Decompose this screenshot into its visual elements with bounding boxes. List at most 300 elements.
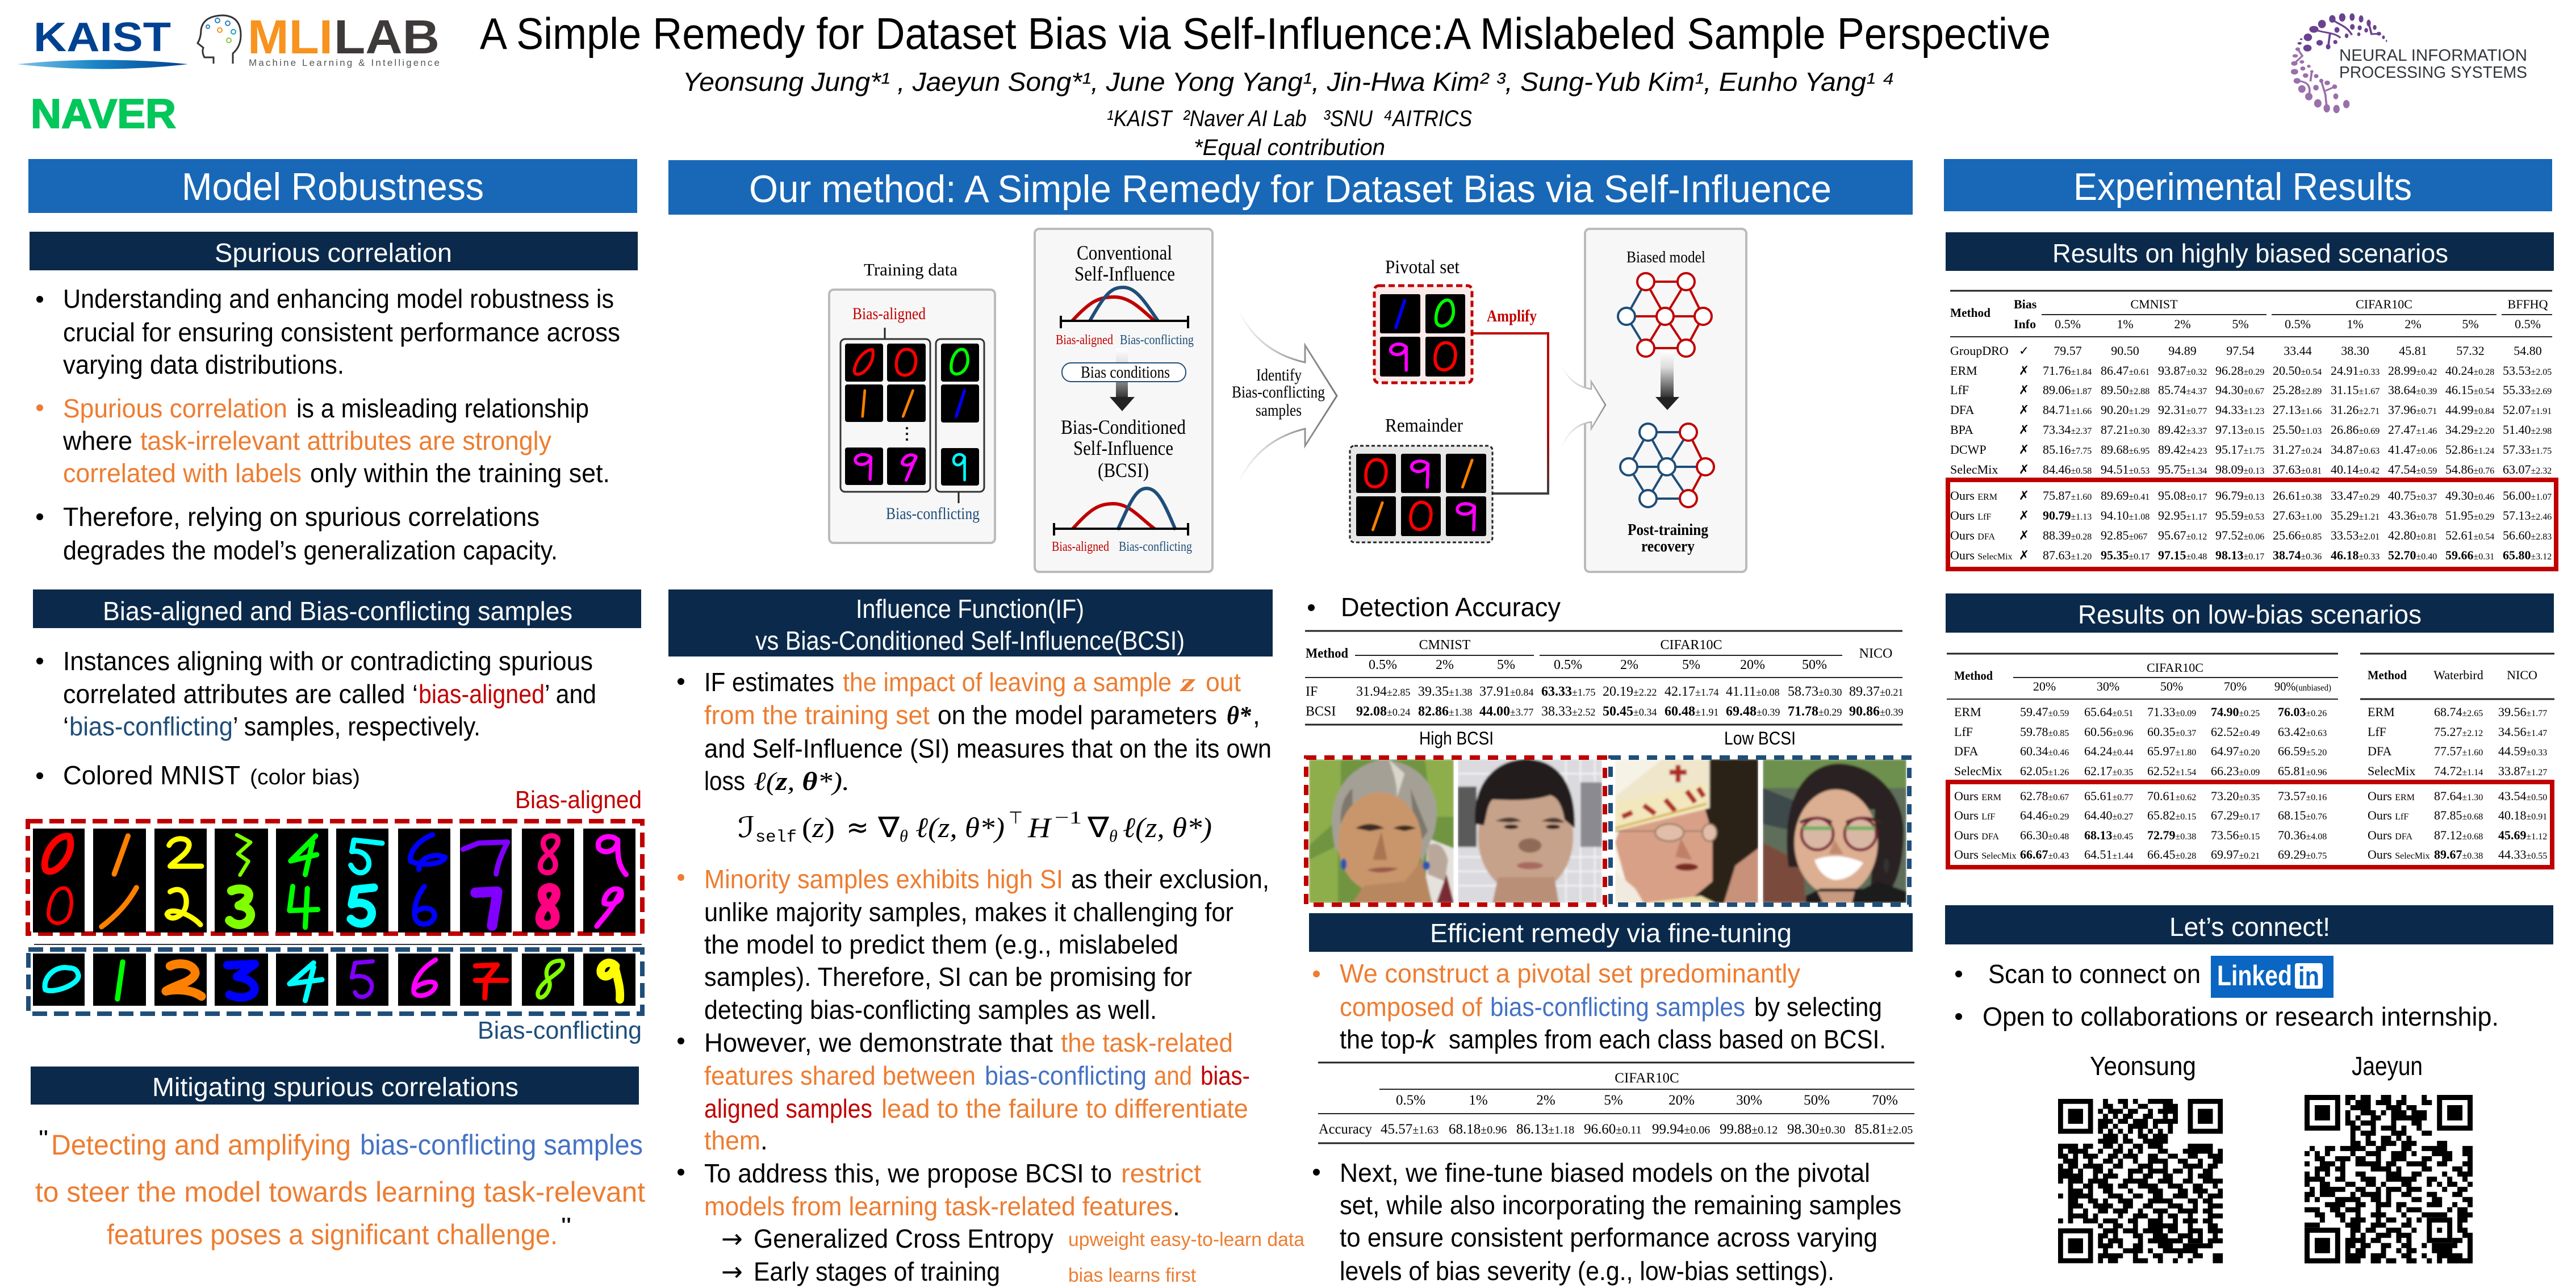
text block: influence function: θ* [1227,701,1252,730]
table: low-bias CIFAR10C [1947,654,2338,862]
text block: spurious correlation bullets: is a misleading relationship [296,394,589,423]
table: highly biased results: ✗ [2019,488,2029,503]
table: detection accuracy: Method [1306,646,1349,661]
table: detection accuracy: 82.86±1.38 [1418,704,1472,719]
table: highly biased results: 0.5% [2515,317,2541,331]
table: low-bias CIFAR10C: 64.40±0.27 [2084,808,2133,822]
table: highly biased results: 2% [2174,317,2191,331]
table: pivotal accuracy: 30% [1736,1093,1762,1108]
table: low-bias Waterbird and NICO: 39.56±1.77 [2498,705,2547,719]
table: detection accuracy [1305,631,1903,725]
table: highly biased results: 94.89 [2168,344,2197,358]
subheading: mitigating spurious correlations [31,1067,639,1105]
table: low-bias CIFAR10C: 59.78±0.85 [2020,725,2069,739]
table: low-bias CIFAR10C: 60.35±0.37 [2147,725,2196,739]
text block: spurious correlation bullets: only within the training set. [310,458,610,488]
table: highly biased results: ✓ [2019,344,2029,358]
image strip: bias-aligned digits [28,821,642,934]
label: Jaeyun: Jaeyun [2352,1051,2423,1081]
table: highly biased results: 89.06±1.87 [2043,383,2092,397]
image strip: bias-conflicting digits [28,944,642,1014]
table: highly biased results: 56.60±2.83 [2503,528,2552,542]
formula: self-influence: θ [900,827,908,846]
table: low-bias CIFAR10C: 65.82±0.15 [2147,808,2196,822]
text block: influence function: IF estimates [704,667,834,697]
table: low-bias Waterbird and NICO: ERM [2368,705,2395,719]
table: low-bias CIFAR10C: DFA [1954,744,1978,758]
text block: BCSI proposal: bias learns first [1068,1265,1197,1286]
logo: KAIST [17,15,188,69]
text block: BCSI proposal [678,1159,1304,1287]
table: low-bias CIFAR10C: 66.67±0.43 [2020,847,2069,862]
formula: self-influence: H [1027,812,1052,843]
arrow: identify bias-conflicting samples: Identify [1256,366,1302,384]
heading: Model Robustness [28,159,637,213]
formula: self-influence: (z) [802,812,835,843]
table: low-bias CIFAR10C: 30% [2097,679,2119,693]
table: highly biased results: 27.13±1.66 [2273,403,2322,417]
text block: spurious correlation bullets: Understanding and enhancing model robustness is [63,284,614,313]
table: highly biased results: 41.47±0.06 [2388,442,2437,457]
table: highly biased results: 87.63±1.20 [2043,548,2092,562]
table: highly biased results: 98.13±0.17 [2215,548,2264,562]
table: highly biased results: 71.76±1.84 [2043,363,2092,378]
table: highly biased results: Bias [2014,297,2037,311]
table: highly biased results: 89.68±6.95 [2101,442,2150,457]
subheading: bias-aligned and bias-conflicting samples: Bias-aligned and Bias-conflicting samples [103,596,572,626]
table: highly biased results: 89.42±4.23 [2158,442,2207,457]
logo: NAVER: NAVER [31,91,176,137]
table: highly biased results: 52.61±0.54 [2445,528,2494,542]
table: highly biased results: 93.87±0.32 [2158,363,2207,378]
table: highly biased results: 87.21±0.30 [2101,423,2150,437]
text block: BCSI proposal: . [1173,1191,1180,1221]
table: low-bias Waterbird and NICO: 43.54±0.50 [2498,789,2547,803]
subheading: let's connect [1945,905,2553,944]
table: highly biased results: 27.63±1.00 [2273,508,2322,522]
table: detection accuracy: 31.94±2.85 [1356,684,1410,699]
table: highly biased results: 97.52±0.06 [2215,528,2264,542]
text block: BCSI proposal: To address this, we propose BCSI to [704,1159,1112,1188]
formula: self-influence: ∇ [1087,811,1110,844]
subheading: IF vs BCSI [668,589,1273,656]
table: low-bias Waterbird and NICO: Method [2368,668,2407,682]
table: pivotal accuracy: 1% [1469,1093,1488,1108]
text block: pivotal set construction: k [1422,1024,1436,1054]
logo: NeurIPS [2291,13,2527,113]
text block: BCSI proposal: Early stages of training [754,1257,1000,1286]
table: highly biased results: ✗ [2019,403,2029,417]
label: Yeonsung: Yeonsung [2090,1051,2196,1081]
logo: MLILAB [198,10,440,68]
table: pivotal accuracy: 50% [1804,1093,1830,1108]
arrow: identify bias-conflicting samples: Bias-conflicting [1232,383,1325,402]
table: highly biased results: 5% [2232,317,2249,331]
formula: self-influence: ∇ [877,811,900,844]
table: highly biased results: 25.50±1.03 [2273,423,2322,437]
table: detection accuracy: 50% [1802,658,1827,672]
table: pivotal accuracy: Accuracy [1319,1122,1372,1137]
table: detection accuracy: CIFAR10C [1661,638,1722,653]
subheading: mitigating spurious correlations: Mitigating spurious correlations [152,1072,518,1102]
table: low-bias CIFAR10C: 66.23±0.09 [2211,764,2260,778]
table: pivotal accuracy: 70% [1872,1093,1898,1108]
table: low-bias CIFAR10C: Ours ERM [1954,789,2001,803]
table: highly biased results: 84.71±1.66 [2043,403,2092,417]
table: highly biased results: 73.34±2.37 [2043,423,2092,437]
text block: sample definitions: (color bias) [250,766,360,789]
table: detection accuracy: 5% [1497,658,1515,672]
diagram: self-influence comparison: (BCSI) [1098,459,1149,482]
table: detection accuracy: 39.35±1.38 [1418,684,1472,699]
table: pivotal accuracy: 2% [1536,1093,1555,1108]
text block: sample definitions: ‘ [63,712,69,741]
table: highly biased results: 24.91±0.33 [2331,363,2380,378]
subheading: IF vs BCSI: vs Bias-Conditioned Self-Influence(BCSI) [755,626,1185,655]
table: detection accuracy: 38.33±2.52 [1541,704,1595,719]
table: low-bias Waterbird and NICO: SelecMix [2368,764,2415,778]
table: highly biased results: 90.79±1.13 [2043,508,2092,522]
diagram: training data [829,260,995,543]
table: highly biased results: 92.31±0.77 [2158,403,2207,417]
text block: fine-tuning: to ensure consistent performance across varying [1340,1223,1877,1252]
quote: bias-conflicting samples [360,1129,643,1161]
table: pivotal accuracy: 96.60±0.11 [1584,1122,1641,1137]
text block: pivotal set construction: the top- [1340,1024,1423,1054]
table: low-bias CIFAR10C: 62.17±0.35 [2084,764,2133,778]
table: low-bias CIFAR10C: 62.52±0.49 [2211,725,2260,739]
table: low-bias Waterbird and NICO: 89.67±0.38 [2434,847,2483,862]
table: low-bias CIFAR10C: 66.45±0.28 [2147,847,2196,862]
table: highly biased results: 33.44 [2284,344,2312,358]
arrow: identify bias-conflicting samples: samples [1256,401,1302,420]
table: low-bias CIFAR10C: 65.64±0.51 [2084,705,2133,719]
table: detection accuracy: 90.86±0.39 [1849,704,1903,719]
table: low-bias Waterbird and NICO: NICO [2507,668,2537,682]
table: highly biased results: 37.96±0.71 [2388,403,2437,417]
formula: self-influence: self [755,828,797,847]
label: bias-aligned: Bias-aligned [515,786,642,814]
table: highly biased results: 40.75±0.37 [2388,488,2437,503]
table: low-bias CIFAR10C: 74.90±0.25 [2211,705,2260,719]
table: highly biased results: 55.33±2.69 [2503,383,2552,397]
table: low-bias Waterbird and NICO: 40.18±0.91 [2498,808,2547,822]
table: highly biased results: 40.24±0.28 [2445,363,2494,378]
diagram: post-training recovery [1585,229,1746,572]
table: low-bias CIFAR10C: 62.52±1.54 [2147,764,2196,778]
table: low-bias CIFAR10C: 65.81±0.96 [2278,764,2327,778]
text block: pivotal set construction: samples from each class based on BCSI. [1449,1024,1886,1054]
table: detection accuracy: 60.48±1.91 [1665,704,1718,719]
arrow: to post-training [1561,364,1605,449]
table: highly biased results: 26.86±0.69 [2331,423,2380,437]
table: highly biased results: 34.87±0.63 [2331,442,2380,457]
table: highly biased results: 92.85±067 [2101,528,2147,542]
table: highly biased results: SelecMix [1950,462,1998,476]
table: detection accuracy: 63.33±1.75 [1541,684,1595,699]
table: detection accuracy: 50.45±0.34 [1603,704,1657,719]
network: recovered [1620,424,1714,507]
text block: BCSI proposal: models from learning task-related features [704,1191,1173,1221]
table: detection accuracy: 0.5% [1369,658,1397,672]
table: pivotal accuracy: 86.13±1.18 [1516,1122,1574,1137]
table: low-bias Waterbird and NICO [2360,654,2554,862]
text block: task-related features: aligned samples [704,1094,872,1123]
table: low-bias Waterbird and NICO: Ours LfF [2368,808,2408,822]
table: pivotal accuracy: CIFAR10C [1615,1070,1679,1086]
text block: BCSI proposal: → [721,1256,743,1287]
text block: task-related features: . [760,1126,768,1155]
table: low-bias CIFAR10C: 90%(unbiased) [2274,679,2331,693]
logo: MLILAB: Machine Learning & Intelligence [249,57,440,68]
table: highly biased results: 52.07±1.91 [2503,403,2552,417]
table: highly biased results: ✗ [2019,528,2029,542]
diagram: self-influence comparison: Bias-conflicting [1120,333,1194,348]
table: detection accuracy: 92.08±0.24 [1356,704,1410,719]
table: highly biased results: 86.47±0.61 [2101,363,2150,378]
frame: low BCSI samples [1611,758,1909,905]
table: pivotal accuracy: 0.5% [1396,1093,1425,1108]
table: low-bias CIFAR10C: 70% [2224,679,2247,693]
table: low-bias CIFAR10C: 69.97±0.21 [2211,847,2260,862]
text block: pivotal set construction: We construct a pivotal set predominantly [1340,959,1800,988]
table: highly biased results: 92.95±1.17 [2158,508,2207,522]
text block: minority samples: as their exclusion, [1071,864,1269,894]
table: low-bias CIFAR10C: 64.46±0.29 [2020,808,2069,822]
table: highly biased results: ✗ [2019,423,2029,437]
table: highly biased results: ERM [1950,363,1977,378]
text block: sample definitions: Colored MNIST [63,760,240,790]
table: low-bias CIFAR10C: Method [1954,668,1993,683]
table: pivotal accuracy: 5% [1604,1093,1623,1108]
table: low-bias Waterbird and NICO: 77.57±1.60 [2434,744,2483,758]
subheading: let's connect: Let’s connect! [2169,912,2330,942]
text block: task-related features: bias- [1201,1061,1250,1090]
connector: amplify line [1472,333,1548,494]
table: highly biased results: 45.81 [2399,344,2427,358]
table: low-bias Waterbird and NICO: 75.27±2.12 [2434,725,2483,739]
subheading: bias-aligned and bias-conflicting samples [33,589,641,628]
table: highly biased results: Ours LfF [1950,508,1991,522]
text block: task-related features: and [1154,1061,1192,1090]
table: highly biased results: 51.40±2.98 [2503,423,2552,437]
title: A Simple Remedy for Dataset Bias via Self-Influence:A Mislabeled Sample Perspective [480,9,2051,58]
text block: spurious correlation bullets: where [62,426,132,455]
table: highly biased results: 31.26±2.71 [2331,403,2380,417]
table: highly biased results: LfF [1950,383,1969,397]
table: low-bias Waterbird and NICO: DFA [2368,744,2391,758]
table: highly biased results: 38.64±0.39 [2388,383,2437,397]
text block: influence function [678,667,1272,796]
equal contribution note: *Equal contribution [1194,135,1385,160]
text block: minority samples [678,864,1269,1024]
table: highly biased results: 31.15±1.67 [2331,383,2380,397]
quote: " [561,1214,571,1239]
table: highly biased results: 95.17±1.75 [2215,442,2264,457]
table: low-bias CIFAR10C: ERM [1954,705,1981,719]
table: low-bias Waterbird and NICO: 87.64±1.30 [2434,789,2483,803]
text block: BCSI proposal: Generalized Cross Entropy [754,1224,1053,1253]
panel: our method [668,160,1914,1287]
table: low-bias CIFAR10C: 50% [2160,679,2183,693]
affiliations: ¹KAIST ²Naver AI Lab ³SNU ⁴AITRICS [1107,106,1472,131]
table: detection accuracy: 71.78±0.29 [1788,704,1842,719]
table: highly biased results: 25.28±2.89 [2273,383,2322,397]
table: detection accuracy: 42.17±1.74 [1665,684,1718,699]
table: pivotal accuracy: 85.81±2.05 [1855,1122,1913,1137]
table: highly biased results: Ours SelecMix [1950,548,2013,562]
table: highly biased results: 49.30±0.46 [2445,488,2494,503]
table: highly biased results: ✗ [2019,548,2029,562]
text block: spurious correlation bullets: crucial for ensuring consistent performance across [63,317,620,347]
highlight: ours rows, low-bias [1948,782,2552,867]
table: low-bias CIFAR10C: LfF [1954,725,1973,739]
table: highly biased results: 94.51±0.53 [2101,462,2150,476]
network: biased [1618,273,1712,357]
table: highly biased results: Ours ERM [1950,488,1997,503]
table: pivotal accuracy: 20% [1668,1093,1695,1108]
table: low-bias CIFAR10C: 70.61±0.62 [2147,789,2196,803]
formula: self-influence: ⊤ [1009,808,1023,828]
table: highly biased results: 38.30 [2341,344,2369,358]
table: low-bias CIFAR10C: 73.20±0.35 [2211,789,2260,803]
diagram: self-influence comparison: Conventional [1077,241,1172,264]
subheading: highly biased scenarios [1946,232,2554,271]
table: low-bias CIFAR10C: 73.56±0.15 [2211,828,2260,842]
label: high BCSI: High BCSI [1419,728,1494,748]
text block: task-related features [678,1028,1250,1155]
table: highly biased results: 31.27±0.24 [2273,442,2322,457]
table: highly biased results: ✗ [2019,383,2029,397]
table: detection accuracy: IF [1306,684,1318,699]
heading: experimental results: Experimental Results [2073,165,2412,208]
table: highly biased results: 65.80±3.12 [2503,548,2552,562]
table: pivotal accuracy: 99.88±0.12 [1720,1122,1778,1137]
text block: pivotal set construction: by selecting [1754,992,1882,1022]
icon: LinkedIn logo: Linked [2217,960,2292,992]
table: low-bias Waterbird and NICO: 44.33±0.55 [2498,847,2547,862]
arrow: identify bias-conflicting samples [1232,309,1337,484]
text block: task-related features: the task-related [1061,1028,1233,1057]
text block: spurious correlation bullets [36,284,620,565]
table: highly biased results: ✗ [2019,442,2029,457]
table: highly biased results: Method [1950,306,1990,320]
table: low-bias Waterbird and NICO: Waterbird [2433,668,2483,682]
text: detection accuracy: Detection Accuracy [1341,592,1561,622]
table: low-bias CIFAR10C: 66.59±5.20 [2278,744,2327,758]
text block: minority samples: unlike majority samples, makes it challenging for [704,897,1233,927]
quote: to steer the model towards learning task-relevant [35,1176,645,1208]
table: highly biased results: 47.54±0.59 [2388,462,2437,476]
text block: sample definitions: bias-conflicting [69,712,233,741]
table: highly biased results: 0.5% [2055,317,2081,331]
subheading: spurious correlation: Spurious correlation [215,238,452,267]
table: detection accuracy: 2% [1436,658,1454,672]
text block: sample definitions: Instances aligning with or contradicting spurious [63,646,593,676]
table: highly biased results: 95.59±0.53 [2215,508,2264,522]
table: highly biased results: 95.75±1.34 [2158,462,2207,476]
text block: influence function: z [1179,668,1195,697]
table: low-bias CIFAR10C: 72.79±0.38 [2147,828,2196,842]
table: low-bias Waterbird and NICO: 45.69±1.12 [2498,828,2547,842]
table: low-bias CIFAR10C: 65.61±0.77 [2084,789,2133,803]
text block: pivotal set construction: bias-conflicting samples [1490,992,1745,1022]
text block: sample definitions [36,646,596,790]
table: highly biased results: 95.67±0.12 [2158,528,2207,542]
table: low-bias CIFAR10C: 62.78±0.67 [2020,789,2069,803]
text block: pivotal set construction: composed of [1340,992,1482,1022]
diagram: self-influence comparison: Bias-aligned [1056,333,1113,348]
icon: LinkedIn logo: in [2298,961,2319,991]
table: highly biased results [1950,291,2552,562]
table: low-bias CIFAR10C: Ours DFA [1954,828,2000,842]
text block: BCSI proposal: upweight easy-to-learn data [1068,1229,1304,1251]
table: low-bias CIFAR10C: 68.15±0.76 [2278,808,2327,822]
logo: NeurIPS: NEURAL INFORMATION [2339,47,2527,65]
table: highly biased results: BPA [1950,423,1973,437]
table: detection accuracy: 0.5% [1554,658,1582,672]
authors: Yeonsung Jung*¹ , Jaeyun Song*¹, June Yong Yang¹, Jin-Hwa Kim² ³, Sung-Yub Kim¹, Eunho Yang¹ ⁴ [683,67,1895,97]
table: highly biased results: 1% [2347,317,2364,331]
table: highly biased results: 44.99±0.84 [2445,403,2494,417]
subheading: efficient remedy: Efficient remedy via fine-tuning [1430,918,1792,948]
table: highly biased results: 97.54 [2226,344,2255,358]
subheading: IF vs BCSI: Influence Function(IF) [856,594,1084,624]
table: highly biased results: 46.18±0.33 [2331,548,2380,562]
table: pivotal accuracy: 99.94±0.06 [1652,1122,1710,1137]
table: low-bias CIFAR10C: 60.56±0.96 [2084,725,2133,739]
label: low BCSI: Low BCSI [1724,728,1796,748]
icon: LinkedIn logo [2211,956,2334,998]
table: highly biased results: 34.29±2.20 [2445,423,2494,437]
diagram: post-training recovery: Biased model [1626,249,1705,266]
table: highly biased results: 84.46±0.58 [2043,462,2092,476]
formula: self-influence: θ [1109,827,1118,846]
table: highly biased results: GroupDRO [1950,344,2009,358]
diagram: self-influence comparison: Bias-Conditioned [1061,416,1186,438]
table: highly biased results: 37.63±0.81 [2273,462,2322,476]
table: highly biased results: 26.61±0.38 [2273,488,2322,503]
text block: influence function: out [1206,667,1241,697]
table: detection accuracy: NICO [1859,646,1892,661]
table: highly biased results: 90.50 [2111,344,2139,358]
table: detection accuracy: 44.00±3.77 [1479,704,1533,719]
diagram: post-training recovery: Post-training [1628,521,1708,539]
diagram: self-influence comparison: Bias-aligned [1052,540,1109,554]
logo: MLILAB: LAB [334,10,440,64]
table: detection accuracy: 41.11±0.08 [1726,684,1780,699]
table: low-bias Waterbird and NICO: Ours DFA [2368,828,2413,842]
table: highly biased results: 96.28±0.29 [2215,363,2264,378]
table: highly biased results: Ours DFA [1950,528,1996,542]
text block: spurious correlation bullets: correlated with labels [63,458,302,488]
QR code: Yeonsung [2058,1099,2223,1263]
table: low-bias Waterbird and NICO: 44.59±0.33 [2498,744,2547,758]
text block: fine-tuning: set, while also incorporating the remaining samples [1340,1190,1901,1220]
text block: connect bullets: Scan to connect on [1988,959,2201,989]
text block: task-related features: bias-conflicting [985,1061,1147,1090]
photo: woman with glasses [1763,759,1906,903]
heading: Model Robustness: Model Robustness [182,165,484,208]
table: highly biased results: 35.29±1.21 [2331,508,2380,522]
table: highly biased results: 79.57 [2054,344,2082,358]
table: low-bias CIFAR10C: 64.97±0.20 [2211,744,2260,758]
text block: BCSI proposal: restrict [1121,1159,1201,1188]
table: highly biased results: 63.07±2.32 [2503,462,2552,476]
text block: sample definitions: ’ and [545,679,596,709]
table: low-bias CIFAR10C: 68.13±0.45 [2084,828,2133,842]
table: highly biased results: Info [2014,317,2036,331]
